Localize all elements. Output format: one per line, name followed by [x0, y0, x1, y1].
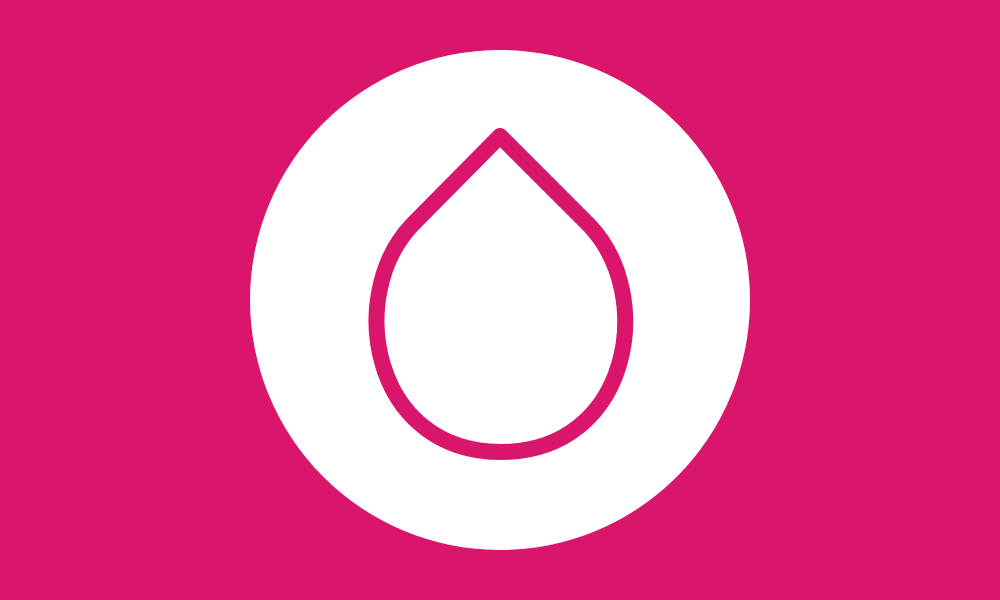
white circle background	[250, 50, 750, 550]
icon: water drop	[377, 136, 625, 452]
